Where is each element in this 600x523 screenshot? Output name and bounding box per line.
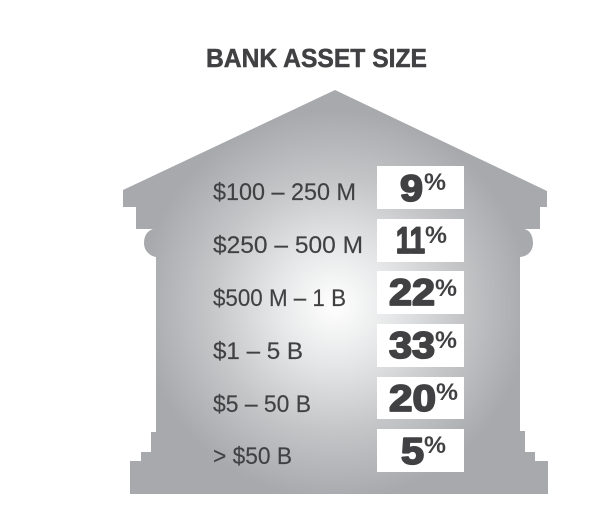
- row: $250 - 500 M: [213, 219, 464, 262]
- row: $500 M - 1 B: [213, 271, 464, 314]
- value box: 22%: [377, 271, 464, 314]
- value box: 11%: %: [425, 222, 447, 249]
- value box: 22%: %: [435, 275, 457, 302]
- value box: 33%: 33: [389, 325, 435, 366]
- row: $100 - 250 M: [213, 166, 464, 209]
- row: $1 - 5 B: [213, 324, 464, 367]
- value box: 11%: 11: [396, 220, 425, 261]
- value box: 22%: 22: [389, 272, 435, 313]
- row: > $50 B: [213, 429, 464, 472]
- value box: 5%: 5: [401, 431, 424, 472]
- value box: 33%: %: [435, 327, 457, 354]
- value box: 9%: 9: [400, 168, 423, 209]
- label: $5 - 50 B: $5 – 50 B: [213, 391, 311, 418]
- value box: 9%: %: [424, 169, 446, 196]
- label: $1 - 5 B: $1 – 5 B: [213, 338, 303, 365]
- value box: 20%: %: [436, 379, 458, 406]
- bank building silhouette: [123, 90, 548, 494]
- title: BANK ASSET SIZE: [206, 43, 427, 73]
- value box: 20%: [377, 377, 464, 419]
- value box: 5%: [377, 429, 464, 472]
- label: > $50 B: > $50 B: [213, 443, 292, 470]
- label: $500 M - 1 B: $500 M – 1 B: [213, 285, 346, 312]
- value box: 33%: [377, 324, 464, 367]
- label: $250 - 500 M: $250 – 500 M: [213, 232, 363, 259]
- value box: 11%: [377, 219, 464, 262]
- row: $5 - 50 B: [213, 377, 464, 419]
- value box: 20%: 20: [389, 378, 436, 419]
- label: $100 - 250 M: $100 – 250 M: [213, 179, 356, 206]
- value box: 5%: %: [424, 432, 446, 459]
- value box: 9%: [377, 166, 464, 209]
